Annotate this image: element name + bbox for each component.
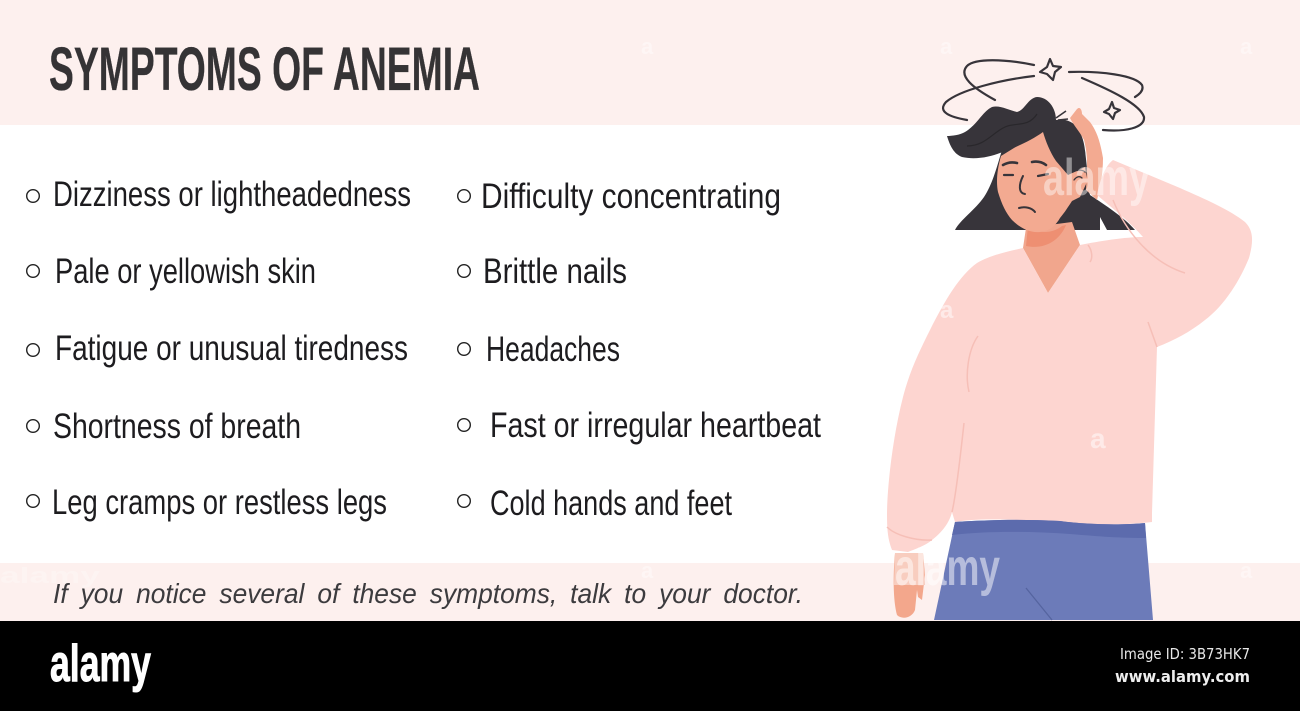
symptom: brittle nails: Brittle nails [483, 252, 627, 291]
dizziness swirl with stars [943, 59, 1144, 130]
watermark: alamy across head: alamy [1043, 149, 1150, 207]
hair back [955, 130, 1135, 230]
symptom: fatigue: Fatigue or unusual tiredness [55, 329, 408, 368]
symptom: shortness of breath: Shortness of breath [53, 407, 301, 446]
symptom list: left column [27, 175, 411, 522]
face [997, 130, 1087, 232]
watermark: faint letters on bands [0, 34, 1253, 588]
watermark: faint letters on bands: a [641, 558, 654, 583]
image id: Image ID: 3B73HK7 [1120, 645, 1250, 663]
watermark: faint letters on bands: a [1240, 34, 1253, 59]
symptom: cold hands and feet: Cold hands and feet [490, 484, 732, 523]
hair flyaways [1051, 107, 1068, 120]
skirt waist shadow [952, 520, 1146, 538]
symptom: dizziness: Dizziness or lightheadedness [53, 175, 411, 214]
neck [1023, 222, 1080, 293]
illustration: dizzy woman [887, 59, 1252, 620]
skirt fold [1026, 588, 1052, 620]
symptom: fast heartbeat: Fast or irregular heartbeat [490, 406, 821, 445]
lowered hand [894, 553, 925, 618]
watermark: lower alamy: alamy [895, 539, 1000, 597]
alamy logo: alamy [50, 635, 151, 693]
website: www.alamy.com [1115, 667, 1250, 686]
watermark: faint letters on bands: a [1240, 558, 1253, 583]
watermark: faint letters on bands: alamy [0, 563, 101, 588]
symptom: leg cramps: Leg cramps or restless legs [52, 483, 387, 522]
chin shadow [1026, 225, 1066, 247]
symptom: pale skin: Pale or yellowish skin [55, 252, 316, 291]
symptom: difficulty concentrating: Difficulty concentrating [481, 177, 781, 216]
watermark: small letter on torso: a [1090, 423, 1106, 454]
header band [0, 0, 1300, 125]
skirt [934, 520, 1153, 620]
hair top [947, 97, 1085, 175]
watermark: small letter on shoulder: a [940, 297, 954, 324]
watermark: faint letters on bands: a [641, 34, 654, 59]
symptom: headaches: Headaches [486, 330, 620, 369]
symptom: headaches [458, 330, 620, 369]
bottom credit bar [0, 621, 1300, 711]
hand cuff shading [894, 553, 925, 585]
title: SYMPTOMS OF ANEMIA [49, 35, 480, 103]
symptom list: right column [458, 177, 821, 523]
face features [1003, 162, 1085, 212]
watermark: faint letters on bands: a [940, 34, 953, 59]
sweater fold lines [887, 200, 1185, 540]
footer note: If you notice several of these symptoms, talk to your doctor. [53, 578, 803, 609]
sweater [887, 160, 1252, 552]
footer band [0, 563, 1300, 621]
forearm and raised hand [1070, 108, 1103, 200]
hair wave strand [967, 114, 1037, 146]
